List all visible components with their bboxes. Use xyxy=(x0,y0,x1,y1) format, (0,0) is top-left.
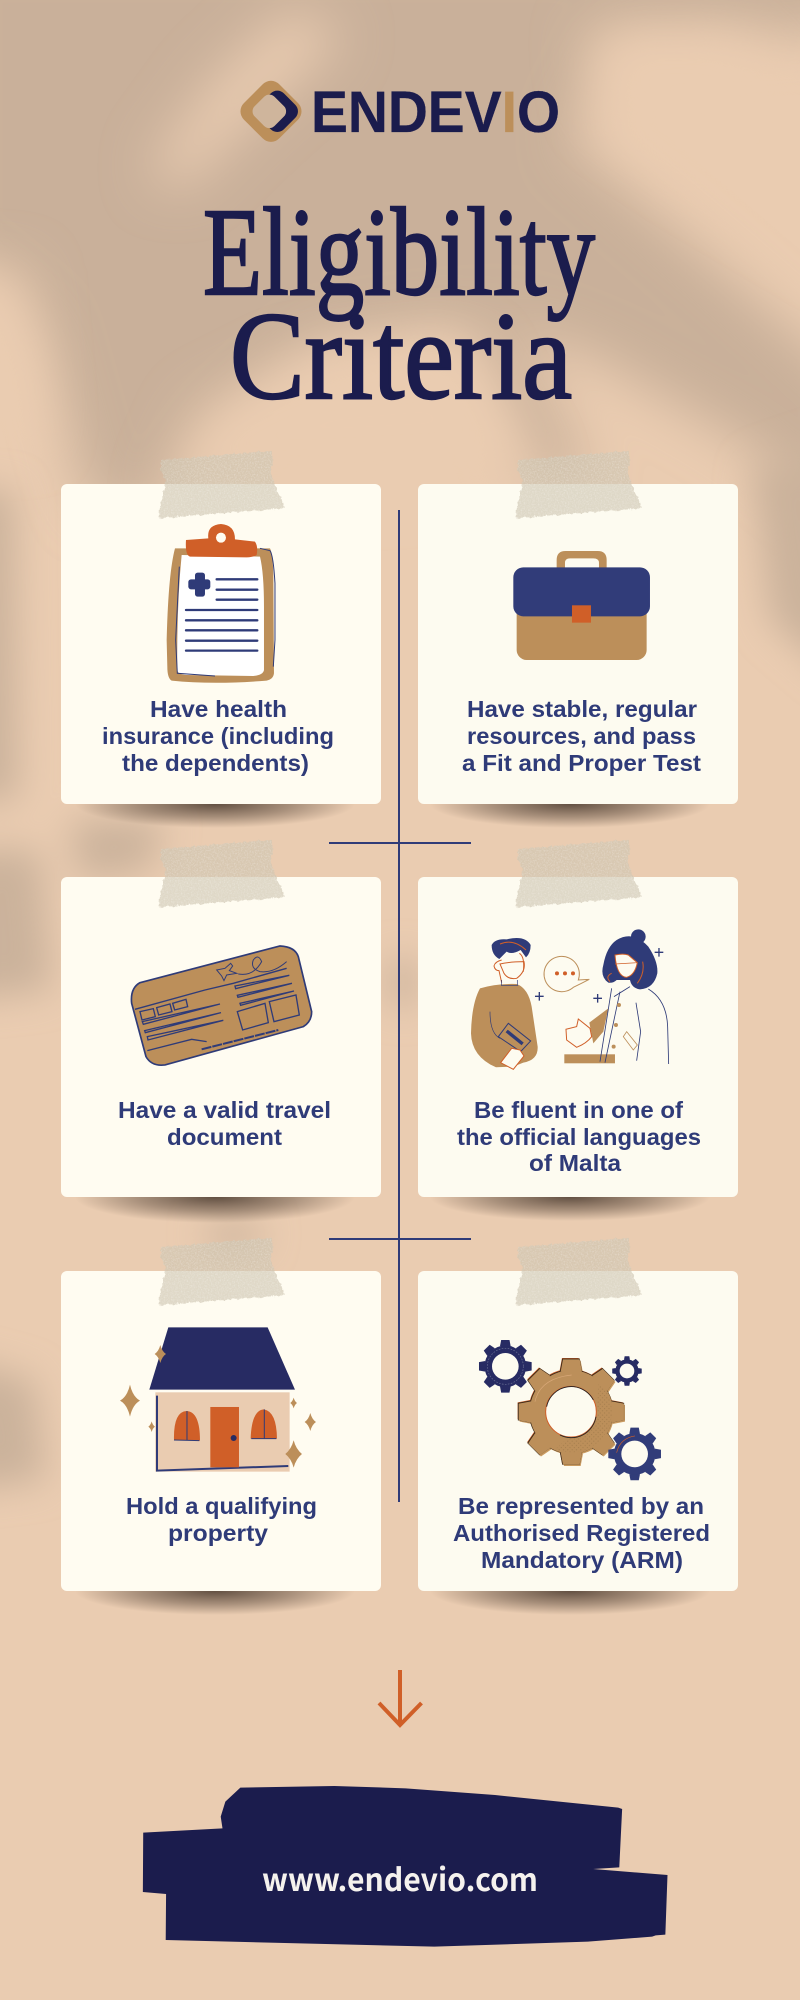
label: stable resources xyxy=(462,696,701,776)
label: stable resources: Have stable, regular xyxy=(467,696,697,722)
small gear top left xyxy=(479,1340,532,1393)
label: official languages: of Malta xyxy=(529,1150,621,1176)
label: travel document: document xyxy=(167,1124,282,1150)
label: health insurance xyxy=(102,696,334,776)
label: travel document xyxy=(118,1097,331,1150)
panel: health insurance xyxy=(61,451,381,828)
label: official languages: Be fluent in one of xyxy=(474,1097,683,1123)
logo wordmark: ENDEVIO xyxy=(311,80,560,145)
logo xyxy=(236,76,560,147)
panel: stable resources xyxy=(418,451,738,828)
label: stable resources: resources, and pass xyxy=(467,723,696,749)
label: authorised registered mandatory: Mandatory (ARM) xyxy=(481,1547,683,1573)
small gear top right xyxy=(612,1356,642,1386)
icon: boarding pass xyxy=(131,946,312,1065)
label: stable resources: a Fit and Proper Test xyxy=(462,750,701,776)
man xyxy=(471,938,538,1069)
label: health insurance: the dependents) xyxy=(122,750,309,776)
label: official languages xyxy=(457,1097,701,1176)
label: qualifying property xyxy=(126,1493,317,1546)
title: Criteria xyxy=(230,288,572,426)
panel: qualifying property xyxy=(61,1238,381,1615)
label: authorised registered mandatory xyxy=(453,1493,710,1573)
website url: www.endevio.com xyxy=(262,1855,538,1900)
panel: travel document xyxy=(61,840,381,1223)
panel: authorised registered mandatory xyxy=(418,1238,738,1615)
label: qualifying property: property xyxy=(168,1520,268,1546)
main gear xyxy=(518,1358,625,1466)
brush shape xyxy=(143,1786,667,1947)
title: Eligibility xyxy=(203,184,595,322)
footer banner xyxy=(143,1786,667,1947)
woman xyxy=(564,929,669,1064)
logo mark xyxy=(236,76,306,147)
icon: house xyxy=(120,1327,316,1472)
label: health insurance: insurance (including xyxy=(102,723,334,749)
icon: two people talking xyxy=(471,929,669,1069)
label: authorised registered mandatory: Be represented by an xyxy=(458,1493,704,1519)
icon: clipboard xyxy=(167,524,275,683)
icon: briefcase xyxy=(513,551,650,660)
small gear bottom right xyxy=(608,1428,661,1480)
panel: official languages xyxy=(418,840,738,1221)
title xyxy=(203,184,595,426)
label: official languages: the official languages xyxy=(457,1124,701,1150)
label: qualifying property: Hold a qualifying xyxy=(126,1493,317,1519)
arrow: down xyxy=(379,1670,422,1725)
label: health insurance: Have health xyxy=(150,696,287,722)
speech bubble xyxy=(544,956,589,992)
timeline connector lines xyxy=(329,510,471,1502)
label: travel document: Have a valid travel xyxy=(118,1097,331,1123)
icon: gears xyxy=(479,1340,661,1480)
label: authorised registered mandatory: Authorised Registered xyxy=(453,1520,710,1546)
